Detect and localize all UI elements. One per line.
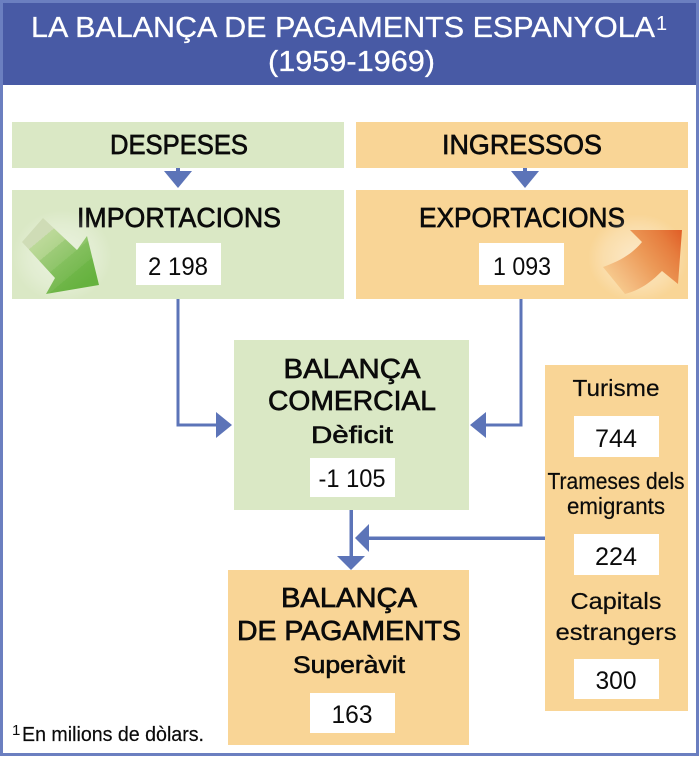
capitals estrangers: estrangers — [556, 619, 676, 645]
panel: ingressos — [356, 122, 688, 168]
capitals estrangers: Capitals — [570, 588, 662, 614]
turisme — [572, 375, 660, 457]
panel: balança de pagaments — [228, 570, 469, 745]
panel: despeses — [12, 122, 344, 168]
panel: balança comercial — [234, 340, 469, 510]
trameses dels emigrants: emigrants — [567, 493, 665, 519]
panel: despeses: DESPESES — [110, 129, 248, 160]
panel: importacions: IMPORTACIONS — [77, 202, 281, 233]
panel: balança de pagaments: BALANÇA — [281, 582, 417, 613]
panel: exportacions: EXPORTACIONS — [419, 202, 625, 233]
turisme: Turisme — [572, 375, 660, 401]
title banner: (1959-1969) — [268, 46, 435, 78]
trameses dels emigrants: Trameses dels — [548, 468, 684, 494]
arrow: ingressos to exportacions — [511, 168, 539, 188]
panel: balança comercial: Dèficit — [311, 422, 393, 449]
arrow: other income to balança de pagaments — [355, 524, 545, 552]
value: dèficit — [310, 458, 395, 497]
value: superàvit: 163 — [332, 701, 372, 729]
panel: importacions — [12, 190, 344, 302]
panel: balança comercial: COMERCIAL — [268, 385, 436, 416]
trameses dels emigrants — [548, 468, 684, 575]
value: exportacions — [479, 243, 564, 285]
arrow: exportacions to balança comercial — [470, 299, 521, 438]
capitals estrangers: 300 — [596, 667, 636, 695]
footnote: 1 — [12, 722, 20, 739]
icon: green down arrow — [12, 210, 112, 302]
value: dèficit: -1 105 — [318, 465, 386, 493]
panel: ingressos: INGRESSOS — [442, 129, 602, 160]
value: superàvit — [310, 693, 395, 733]
title banner: LA BALANÇA DE PAGAMENTS ESPANYOLA — [31, 12, 656, 44]
panel: balança comercial: BALANÇA — [284, 353, 421, 384]
trameses dels emigrants: 224 — [595, 543, 637, 571]
panel: balança de pagaments: DE PAGAMENTS — [237, 615, 461, 646]
value: importacions: 2 198 — [148, 253, 208, 281]
capitals estrangers — [556, 588, 676, 699]
value: exportacions: 1 093 — [493, 253, 551, 281]
panel: other income — [545, 365, 688, 711]
value: importacions — [136, 243, 221, 285]
arrow: balança comercial to balança de pagaments — [337, 510, 365, 570]
turisme: 744 — [595, 425, 637, 453]
title banner: 1 — [656, 13, 667, 35]
title banner — [3, 3, 696, 85]
arrow: despeses to importacions — [164, 168, 192, 188]
icon: orange up arrow — [588, 214, 688, 302]
footnote: En milions de dòlars. — [22, 724, 204, 746]
panel: exportacions — [356, 190, 688, 302]
panel: balança de pagaments: Superàvit — [293, 652, 405, 679]
arrow: importacions to balança comercial — [178, 299, 232, 438]
